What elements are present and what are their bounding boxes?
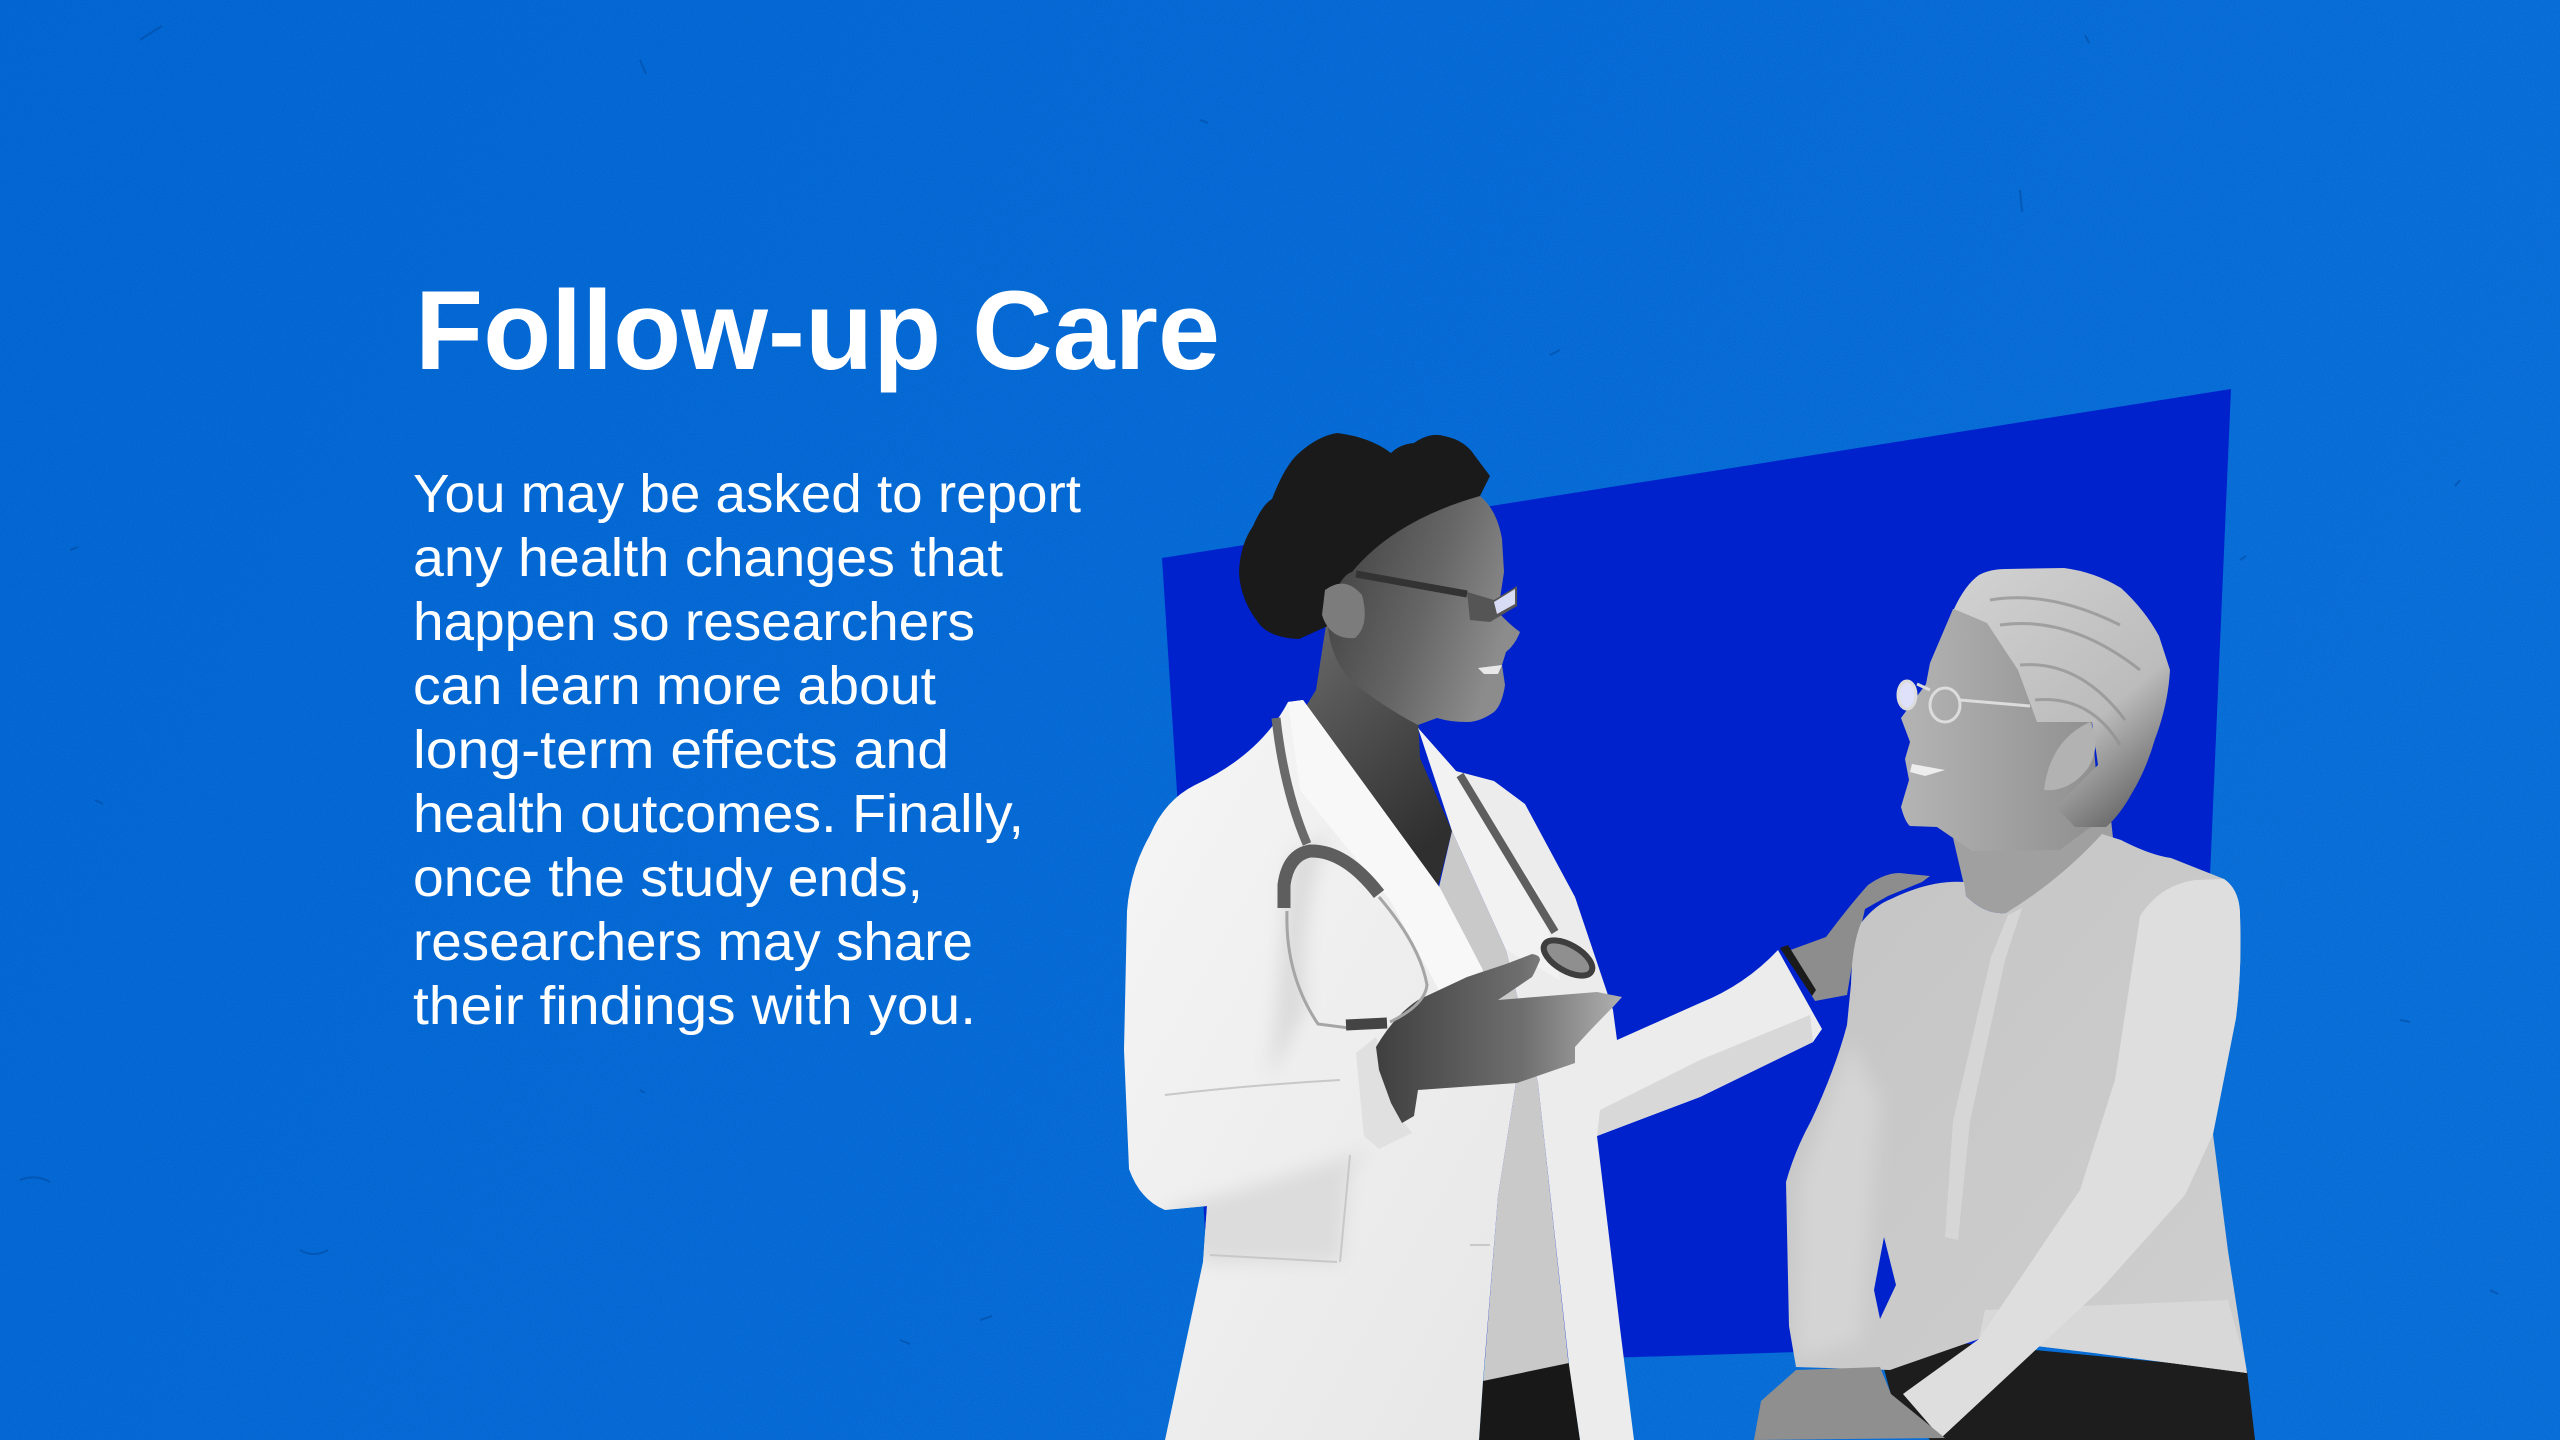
body text bbox=[413, 464, 1081, 1036]
coat fold lines bbox=[1165, 1080, 1490, 1262]
mouth bbox=[1910, 764, 1945, 776]
face bbox=[1328, 496, 1520, 725]
wristband bbox=[1780, 945, 1816, 996]
left hand bbox=[1754, 1367, 1945, 1440]
face bbox=[1901, 609, 2100, 851]
glasses bbox=[1356, 574, 1467, 594]
body text: You may be asked to report bbox=[413, 464, 1081, 524]
body text: health outcomes. Finally, bbox=[413, 784, 1024, 844]
front sleeve bbox=[1903, 879, 2240, 1438]
figure: doctor bbox=[1120, 433, 1930, 1440]
body text: happen so researchers bbox=[413, 592, 975, 652]
cardigan placket bbox=[1945, 908, 2022, 1240]
glasses bbox=[1898, 681, 2030, 722]
patient trousers bbox=[1875, 1335, 2255, 1440]
waist gap bbox=[1874, 1237, 1896, 1319]
title: Follow-up Care bbox=[415, 268, 1220, 393]
mouth bbox=[1478, 665, 1502, 674]
body text: any health changes that bbox=[413, 528, 1003, 588]
doctor hand on shoulder bbox=[1785, 873, 1930, 1001]
coat cuff near hand bbox=[1356, 1037, 1412, 1149]
hair bbox=[1239, 433, 1490, 639]
body text: long-term effects and bbox=[413, 720, 949, 780]
doctor blouse bbox=[1439, 831, 1569, 1385]
coat sleeve shade bbox=[1597, 1015, 1813, 1136]
coat lapel bbox=[1288, 700, 1483, 992]
hand gesturing bbox=[1376, 954, 1622, 1123]
body text: can learn more about bbox=[413, 656, 936, 716]
patient cardigan bbox=[1780, 825, 2260, 1385]
stethoscope bbox=[1276, 718, 1598, 1028]
doctor coat: right front and raised arm bbox=[1418, 728, 1822, 1440]
body text: once the study ends, bbox=[413, 848, 923, 908]
doctor neck bbox=[1300, 625, 1452, 890]
figure: seated patient bbox=[1754, 568, 2260, 1440]
blue angled panel bbox=[1162, 389, 2231, 1370]
hair strands bbox=[1990, 598, 2140, 745]
body text: researchers may share bbox=[413, 912, 973, 972]
doctor coat: left front and sleeve bbox=[1120, 690, 1540, 1440]
doctor trousers bbox=[1479, 1363, 1580, 1440]
hair bbox=[1954, 568, 2170, 827]
body text: their findings with you. bbox=[413, 976, 976, 1036]
patient neck bbox=[1950, 810, 2113, 913]
ear bbox=[1322, 584, 1365, 638]
ear bbox=[2044, 722, 2096, 790]
